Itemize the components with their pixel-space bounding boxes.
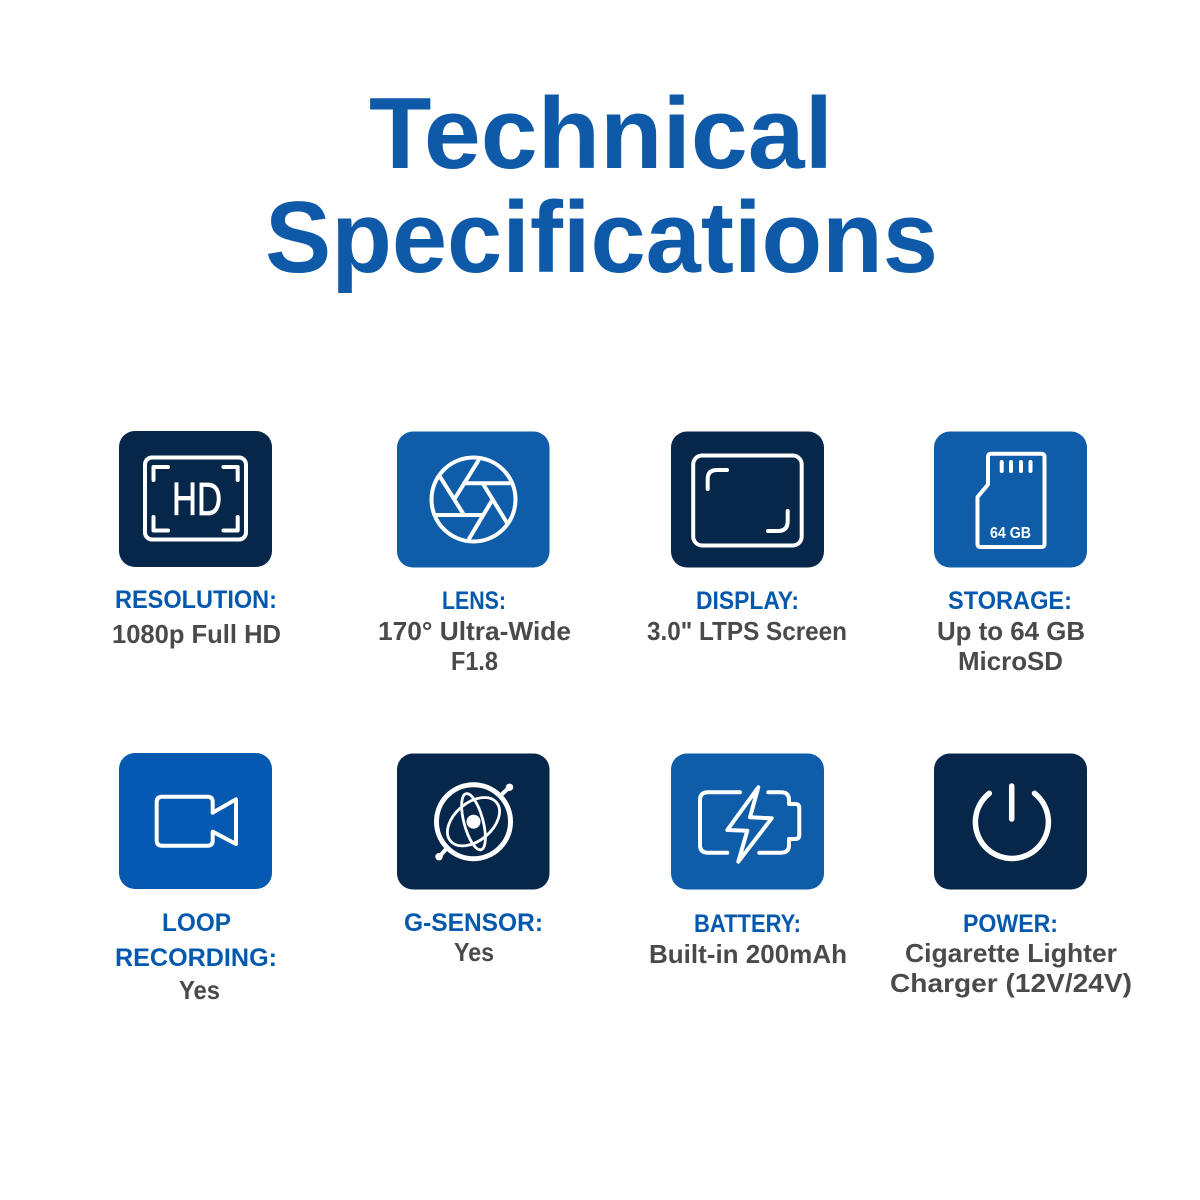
value: lens xyxy=(378,616,571,676)
label: loop recording: LOOP xyxy=(162,909,231,937)
label: power: POWER: xyxy=(963,910,1058,938)
value: storage xyxy=(937,616,1085,676)
value: storage: Up to 64 GB xyxy=(937,616,1085,646)
panel: g-sensor xyxy=(397,754,550,967)
label: loop recording: RECORDING: xyxy=(115,944,277,972)
icon: power button xyxy=(934,754,1087,890)
value: resolution: 1080p Full HD xyxy=(112,619,281,649)
title: Specifications xyxy=(265,182,938,294)
value: power: Charger (12V/24V) xyxy=(890,968,1132,998)
value: power xyxy=(890,938,1132,998)
value: g-sensor: Yes xyxy=(454,937,494,967)
panel: battery xyxy=(649,754,847,969)
icon: charging battery xyxy=(671,754,824,890)
value: power: Cigarette Lighter xyxy=(905,938,1117,968)
label: display: DISPLAY: xyxy=(696,587,799,615)
label: g-sensor: G-SENSOR: xyxy=(404,909,543,937)
label: resolution: RESOLUTION: xyxy=(115,586,277,614)
value: loop recording: Yes xyxy=(179,975,220,1005)
value: lens: 170° Ultra-Wide xyxy=(378,616,571,646)
panel: loop recording xyxy=(115,753,277,1005)
icon: HD xyxy=(119,431,272,567)
label: battery: BATTERY: xyxy=(694,910,801,938)
panel: power xyxy=(890,754,1132,998)
icon: HD: HD xyxy=(172,473,222,525)
icon: video camera xyxy=(119,753,272,889)
label: loop recording xyxy=(115,909,277,972)
panel: resolution xyxy=(112,431,281,649)
panel: storage xyxy=(934,432,1087,676)
value: lens: F1.8 xyxy=(451,646,498,676)
panel: lens xyxy=(378,432,571,676)
title: Technical xyxy=(369,78,833,190)
label: storage: STORAGE: xyxy=(948,587,1072,615)
icon: gyroscope xyxy=(397,754,550,890)
icon: microSD card xyxy=(934,432,1087,568)
value: display: 3.0" LTPS Screen xyxy=(647,616,847,646)
icon: aperture xyxy=(397,432,550,568)
title xyxy=(265,78,938,294)
value: storage: MicroSD xyxy=(958,646,1063,676)
value: battery: Built-in 200mAh xyxy=(649,939,847,969)
label: lens: LENS: xyxy=(442,587,506,615)
icon: screen xyxy=(671,432,824,568)
panel: display xyxy=(647,432,847,646)
icon: microSD card: 64 GB xyxy=(990,525,1031,542)
